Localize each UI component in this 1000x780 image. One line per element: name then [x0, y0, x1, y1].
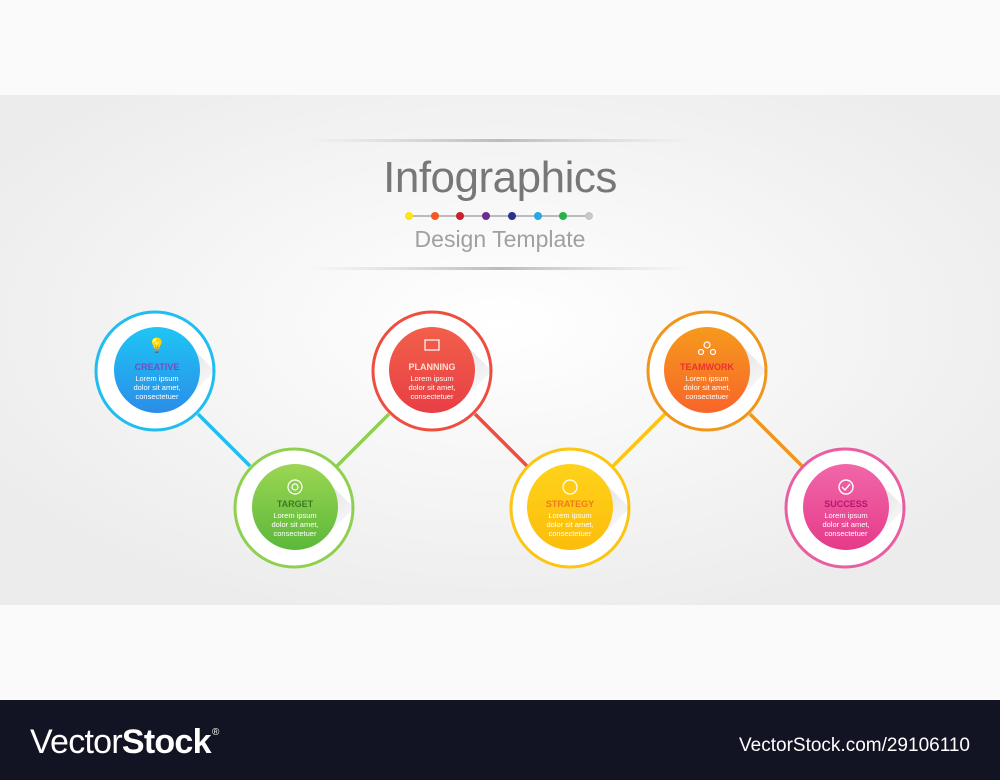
step: planning: [373, 312, 492, 430]
subtitle: Design Template: [415, 226, 585, 252]
footer url: VectorStock.com/29106110: [739, 735, 970, 756]
step: teamwork: [648, 312, 767, 430]
step: target: consectetuer: [274, 529, 317, 538]
step: success: dolor sit amet,: [822, 520, 870, 529]
step: strategy: consectetuer: [549, 529, 592, 538]
step: strategy: Lorem ipsum: [548, 511, 592, 520]
step: creative: CREATIVE: [135, 362, 179, 372]
step: strategy: [511, 449, 630, 567]
step: strategy: STRATEGY: [546, 499, 594, 509]
step: planning: consectetuer: [411, 392, 454, 401]
step: creative: [96, 312, 215, 430]
step: teamwork: dolor sit amet,: [683, 383, 731, 392]
step: planning: Lorem ipsum: [410, 374, 454, 383]
step: target: Lorem ipsum: [273, 511, 317, 520]
color dots line: [405, 212, 593, 220]
title block: [305, 139, 695, 270]
step: strategy: dolor sit amet,: [546, 520, 594, 529]
footer logo: VectorStock: [30, 723, 212, 761]
step: teamwork: TEAMWORK: [680, 362, 734, 372]
step: success: consectetuer: [825, 529, 868, 538]
step: planning: PLANNING: [408, 362, 456, 372]
background band: [0, 95, 1000, 605]
step: creative: dolor sit amet,: [133, 383, 181, 392]
step: success: Lorem ipsum: [824, 511, 868, 520]
footer registered mark: ®: [212, 727, 220, 738]
step: creative: 💡: [148, 337, 166, 354]
step: creative: Lorem ipsum: [135, 374, 179, 383]
step: planning: dolor sit amet,: [408, 383, 456, 392]
step: target: TARGET: [277, 499, 314, 509]
step: target: dolor sit amet,: [271, 520, 319, 529]
step: success: SUCCESS: [824, 499, 868, 509]
footer bar: [0, 700, 1000, 780]
step: success: [786, 449, 905, 567]
title: Infographics: [383, 153, 617, 202]
connectors: [198, 414, 802, 466]
step: creative: consectetuer: [136, 392, 179, 401]
step: target: [235, 449, 354, 567]
step: teamwork: consectetuer: [686, 392, 729, 401]
step: teamwork: Lorem ipsum: [685, 374, 729, 383]
